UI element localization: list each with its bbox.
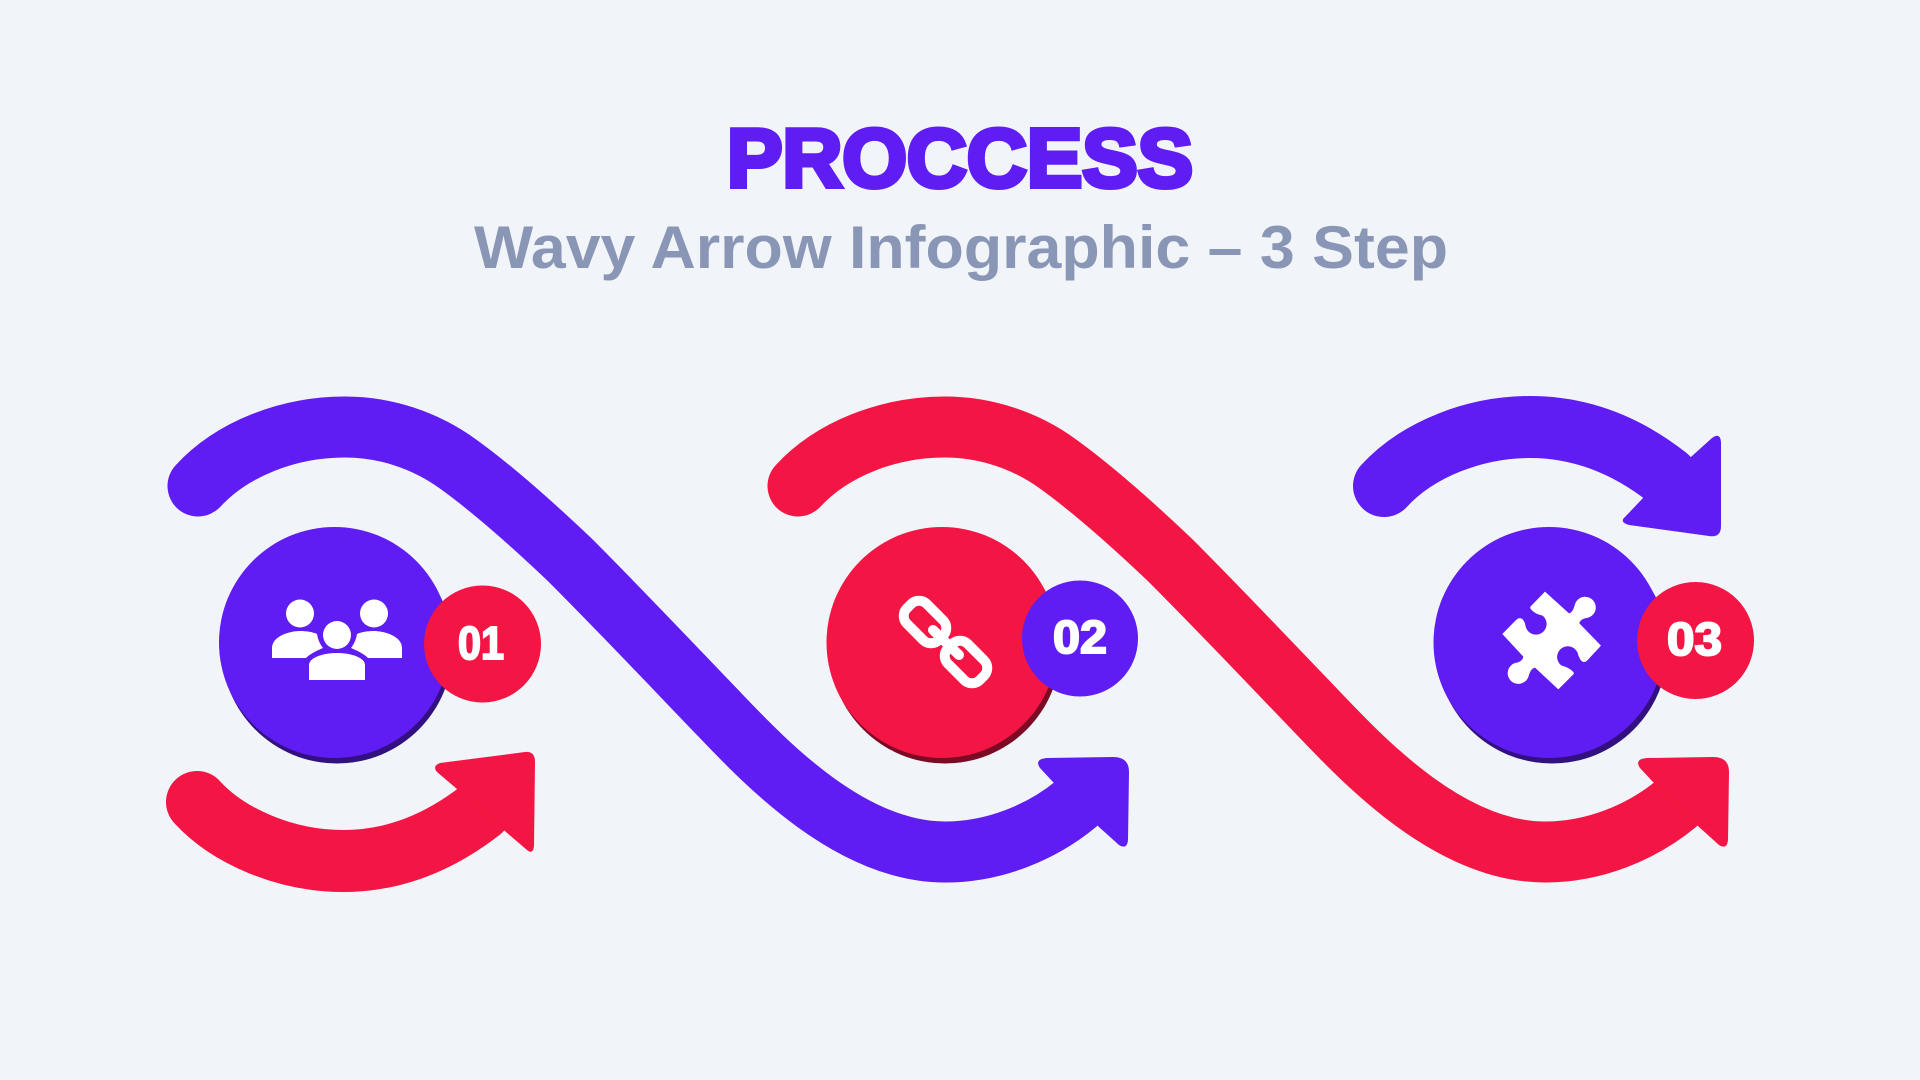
icon: puzzle piece <box>1502 592 1601 689</box>
badge: 03 <box>1637 582 1754 699</box>
arrow: red step 1 <box>197 752 535 861</box>
icon: group of people <box>272 600 402 680</box>
circle: step 1 <box>219 527 452 764</box>
circle: step 3 <box>1434 527 1668 764</box>
arrow: red wave step 2 to 3 <box>798 427 1729 852</box>
subtitle: Wavy Arrow Infographic – 3 Step <box>474 214 1448 281</box>
badge: 01: 01 <box>458 617 504 669</box>
arrow: blue step 3 <box>1384 427 1721 536</box>
arrow: blue wave step 1 to 2 <box>198 427 1129 852</box>
icon: chain link <box>899 596 992 688</box>
title: PROCCESS <box>727 112 1193 204</box>
step 1: team <box>219 527 541 764</box>
badge: 03: 03 <box>1667 613 1722 665</box>
step 2: link <box>826 527 1138 764</box>
badge: 01 <box>424 586 541 702</box>
badge: 02: 02 <box>1053 611 1107 663</box>
step 3: puzzle <box>1434 527 1754 764</box>
circle: step 2 <box>826 527 1060 764</box>
badge: 02 <box>1022 580 1138 696</box>
